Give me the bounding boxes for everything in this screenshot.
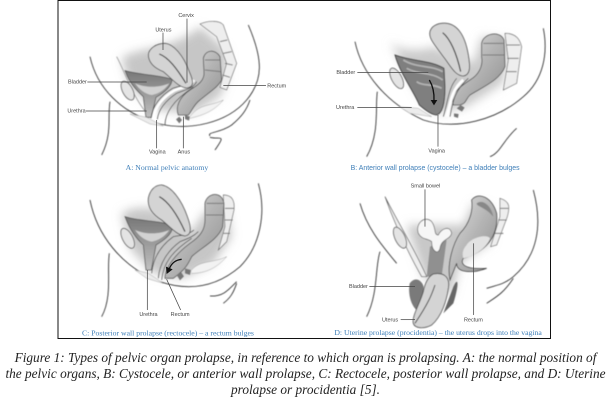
panel B: cystocele [336, 23, 545, 172]
label: Vagina [149, 120, 167, 156]
figure caption: prolapse or procidentia [5]. [231, 382, 380, 397]
label: Vagina [428, 115, 446, 154]
arrow: bladder descending [429, 80, 437, 105]
caption D: D: Uterine prolapse (procidentia) – the uterus drops into the vagina [334, 328, 542, 337]
panel C: rectocele [82, 183, 262, 337]
panel A: normal pelvic anatomy [67, 13, 287, 172]
label: Urethra: Urethra [336, 105, 355, 111]
panel D: procidentia [334, 183, 542, 337]
figure caption: Figure 1: Types of pelvic organ prolapse, in reference to which organ is prolapsing. A: the normal position of [15, 350, 596, 365]
label: Bladder [349, 284, 415, 290]
figure caption [5, 350, 606, 397]
label: Rectum [167, 279, 190, 318]
caption B: B: Anterior wall prolapse (cystocele) – a bladder bulges [351, 165, 520, 172]
illustration D [360, 190, 538, 328]
label: Bladder: Bladder [349, 284, 368, 290]
label: Anus: Anus [178, 150, 190, 156]
label: Uterus: Uterus [155, 27, 172, 33]
label: Uterus [382, 317, 415, 323]
label: Rectum [464, 243, 483, 324]
label: Urethra: Urethra [139, 312, 159, 318]
label: Urethra [336, 105, 412, 111]
label: Rectum: Rectum [464, 318, 483, 324]
label: Bladder [68, 80, 147, 86]
label: Rectum: Rectum [267, 83, 287, 89]
label: Bladder: Bladder [68, 80, 87, 86]
label: Bladder: Bladder [336, 70, 355, 76]
label: Vagina: Vagina [149, 150, 167, 156]
illustration B [355, 23, 545, 157]
figure caption: the pelvic organs, B: Cystocele, or anterior wall prolapse, C: Rectocele, posterior wall prolapse, and D: Uterine [5, 366, 606, 381]
label: Cervix [178, 13, 194, 83]
caption C: C: Posterior wall prolapse (rectocele) – a rectum bulges [82, 328, 254, 337]
label: Uterus: Uterus [382, 317, 398, 323]
label: Small bowel [411, 183, 440, 227]
label: Vagina: Vagina [428, 148, 446, 154]
label: Rectum: Rectum [171, 312, 190, 318]
caption A: A: Normal pelvic anatomy [126, 163, 208, 172]
label: Anus [178, 117, 190, 156]
label: Urethra [139, 270, 159, 318]
figure frame [58, 0, 550, 338]
label: Cervix: Cervix [178, 13, 194, 19]
illustration A [90, 21, 259, 155]
arrow: rectum bulging [166, 259, 182, 274]
illustration C [90, 183, 262, 317]
label: Rectum [223, 83, 287, 89]
label: Uterus [155, 27, 172, 50]
label: Bladder [336, 70, 428, 76]
label: Urethra [67, 109, 147, 115]
label: Small bowel: Small bowel [411, 183, 440, 189]
label: Urethra: Urethra [67, 109, 87, 115]
